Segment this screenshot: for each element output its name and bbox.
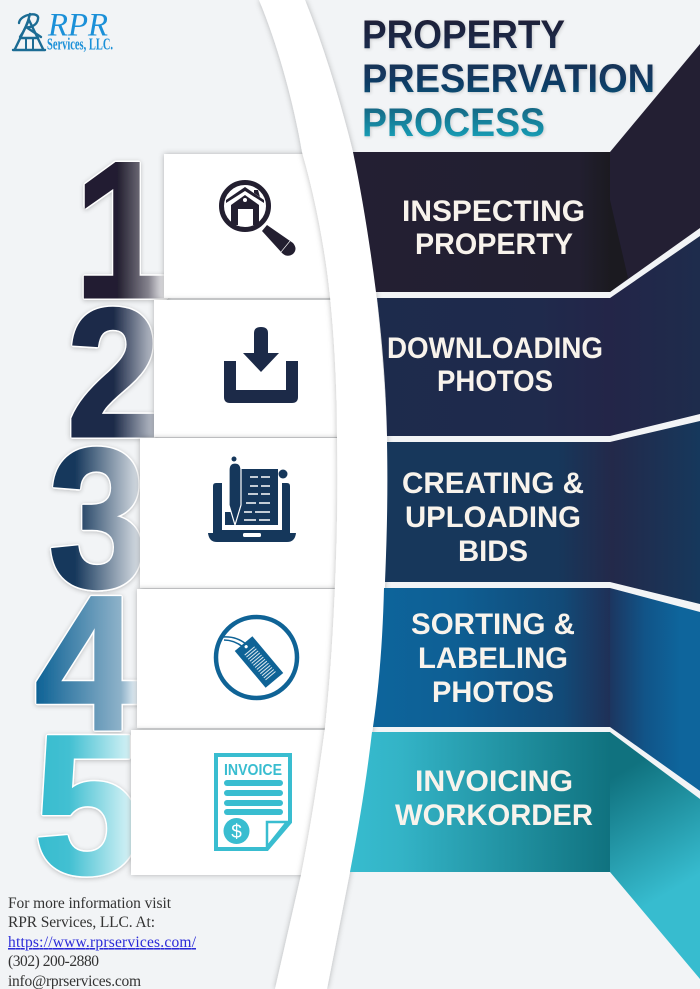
icon: price tag in circle	[216, 617, 297, 698]
logo wordmark Services, LLC.: Services, LLC.	[47, 34, 113, 54]
icon: house A-frame monogram	[13, 14, 45, 50]
label: inspecting property	[402, 195, 585, 261]
icon: download tray	[224, 327, 298, 403]
panel: step 2 card	[154, 300, 349, 437]
label: inspecting property: PROPERTY	[415, 228, 573, 261]
curved white band	[259, 0, 387, 989]
number 1: 1	[74, 122, 170, 338]
step 2 band	[377, 236, 700, 436]
label: invoicing workorder	[395, 765, 593, 832]
number 3: 3	[48, 407, 147, 629]
label: downloading photos: DOWNLOADING	[387, 332, 603, 365]
number 3: 3	[48, 407, 147, 629]
label: downloading photos: PHOTOS	[437, 365, 553, 398]
number 1: 1	[74, 122, 170, 338]
step 1 band	[353, 44, 700, 292]
label: creating and uploading bids: CREATING &	[402, 467, 584, 500]
title: PROCESS	[362, 101, 545, 145]
icon: laptop with document and pen	[208, 456, 296, 542]
contact text block	[8, 895, 197, 989]
title: PRESERVATION	[362, 57, 655, 101]
label: creating and uploading bids	[402, 467, 584, 568]
label: inspecting property: INSPECTING	[402, 195, 585, 228]
contact text block: RPR Services, LLC. At:	[8, 914, 155, 931]
label: sorting and labeling photos	[411, 608, 575, 709]
title	[362, 13, 655, 145]
label: invoicing workorder: INVOICING	[415, 765, 573, 798]
step 5 band	[350, 732, 700, 979]
panel: step 5 card	[131, 730, 331, 875]
title: PROPERTY	[362, 13, 565, 57]
step 3 band	[385, 421, 700, 604]
label: downloading photos	[387, 332, 603, 398]
label: sorting and labeling photos: PHOTOS	[432, 676, 554, 709]
panel: step 1 card	[164, 154, 339, 298]
label: creating and uploading bids: UPLOADING	[405, 501, 581, 534]
contact text block: https://www.rprservices.com/	[8, 934, 197, 951]
icon: invoice document: INVOICE	[224, 762, 282, 779]
contact text block: (302) 200-2880	[8, 953, 99, 970]
number 5: 5	[34, 695, 141, 916]
icon: invoice document: $	[231, 822, 242, 843]
icon: invoice document	[216, 755, 290, 849]
panel: step 4 card	[137, 589, 347, 728]
number 4: 4	[35, 556, 138, 770]
label: creating and uploading bids: BIDS	[458, 535, 528, 568]
logo: RPR Services	[13, 8, 113, 54]
label: sorting and labeling photos: SORTING &	[411, 608, 575, 641]
panel: step 3 card	[140, 438, 350, 588]
contact text block: For more information visit	[8, 895, 172, 912]
number 2: 2	[67, 272, 160, 476]
label: sorting and labeling photos: LABELING	[418, 642, 568, 675]
number 5: 5	[34, 695, 141, 916]
step 4 band	[373, 588, 700, 791]
number 4: 4	[35, 556, 138, 770]
logo wordmark RPR: RPR	[47, 8, 108, 44]
label: invoicing workorder: WORKORDER	[395, 799, 593, 832]
number 2: 2	[67, 272, 160, 476]
icon: house magnifier	[222, 182, 296, 256]
